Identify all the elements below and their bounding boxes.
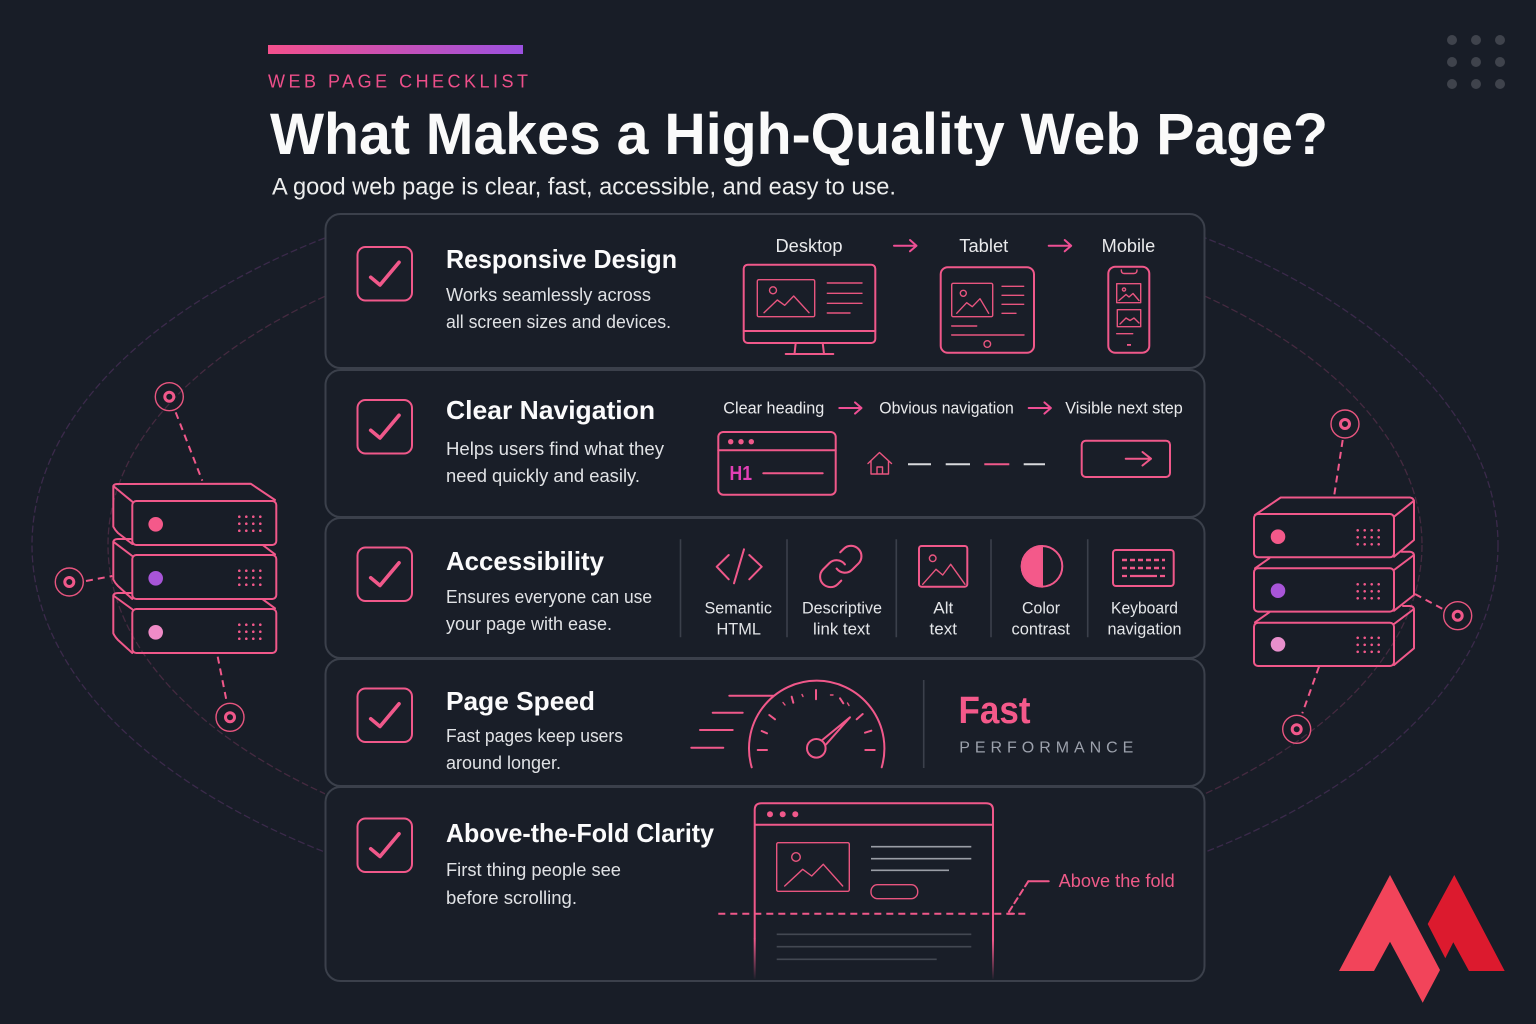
fold line (718, 913, 1027, 915)
right server illustration (1254, 410, 1472, 743)
column labels: navigation (1108, 620, 1182, 638)
server stack (1254, 498, 1414, 666)
nodes (55, 383, 244, 731)
description (446, 725, 623, 773)
panel: responsive design (326, 214, 1204, 368)
heading: Page Speed (446, 686, 595, 716)
panel: above-the-fold clarity (326, 787, 1204, 981)
column labels: HTML (716, 620, 761, 638)
icon: home (868, 452, 892, 474)
icon: checkbox (358, 688, 412, 742)
column labels: Color (1022, 600, 1060, 618)
next step button (1082, 441, 1170, 477)
panel: accessibility (326, 518, 1204, 658)
icon: contrast (1022, 546, 1062, 587)
description (446, 586, 652, 634)
icon: checkbox (358, 400, 412, 454)
step labels: Visible next step (1065, 400, 1183, 418)
browser mockup (755, 803, 993, 979)
divider (923, 680, 925, 768)
device labels: Tablet (959, 236, 1008, 256)
device labels: Mobile (1102, 236, 1155, 256)
panel: page speed (326, 659, 1204, 786)
description (446, 438, 665, 486)
icon: tablet (941, 267, 1034, 353)
Fast label: Fast (958, 690, 1031, 732)
column labels: Keyboard (1111, 600, 1178, 618)
callout leader (1008, 881, 1049, 914)
description (446, 859, 621, 908)
dashed connectors (86, 412, 227, 702)
logo (1339, 875, 1505, 1003)
description: all screen sizes and devices. (446, 311, 671, 332)
description: Works seamlessly across (446, 284, 651, 305)
icon: code (717, 549, 762, 583)
icon: checkbox (358, 548, 412, 601)
description: need quickly and easily. (446, 465, 640, 486)
icon: checkbox (358, 247, 412, 300)
icon: speedometer (691, 681, 884, 767)
column labels: text (930, 620, 957, 638)
icon: checkbox (358, 818, 412, 872)
eyebrow: WEB PAGE CHECKLIST (268, 72, 528, 92)
description: before scrolling. (446, 887, 577, 908)
vent dots (1358, 530, 1380, 652)
step labels (723, 400, 1183, 418)
callout label: Above the fold (1059, 871, 1175, 891)
description: around longer. (446, 752, 561, 773)
performance label: PERFORMANCE (959, 740, 1133, 756)
description (446, 284, 671, 332)
icon: mobile (1108, 267, 1149, 353)
dashed connectors (1302, 440, 1443, 713)
subtitle: A good web page is clear, fast, accessible, and easy to use. (272, 174, 896, 200)
status lights (148, 517, 163, 640)
step labels: Obvious navigation (879, 400, 1014, 418)
icon: desktop (744, 265, 875, 354)
heading: Clear Navigation (446, 395, 655, 425)
device labels (776, 236, 1155, 256)
icon: link (820, 546, 861, 587)
description: Helps users find what they (446, 438, 665, 459)
nodes (1283, 410, 1472, 743)
description: Fast pages keep users (446, 725, 623, 746)
icon: image (919, 546, 967, 587)
background orbit rings (31, 238, 1499, 852)
panel: clear navigation (326, 370, 1204, 517)
navigation dashes (908, 463, 1045, 465)
device labels: Desktop (776, 236, 842, 256)
heading: Accessibility (446, 546, 605, 576)
description: your page with ease. (446, 613, 612, 634)
column labels: contrast (1012, 620, 1070, 638)
column labels: Semantic (704, 600, 772, 618)
heading: Above-the-Fold Clarity (446, 818, 715, 848)
title: What Makes a High-Quality Web Page? (270, 102, 1328, 167)
column labels: link text (813, 620, 870, 638)
vent dots (239, 517, 261, 639)
icon: keyboard (1113, 550, 1174, 586)
column labels: Alt (933, 600, 954, 618)
decorative dot grid, top right (1447, 35, 1505, 89)
column dividers (680, 539, 1088, 637)
arrows (839, 402, 1051, 414)
left server illustration (55, 383, 276, 731)
step labels: Clear heading (723, 400, 824, 418)
column labels: Descriptive (802, 600, 882, 618)
server stack (113, 484, 276, 653)
description: First thing people see (446, 859, 621, 880)
header accent bar (268, 45, 523, 54)
heading: Responsive Design (446, 244, 677, 274)
H1 label: H1 (730, 463, 752, 485)
icon: page with H1 (718, 432, 836, 495)
description: Ensures everyone can use (446, 586, 652, 607)
status lights (1271, 529, 1285, 652)
arrows (894, 240, 1071, 251)
column labels (704, 600, 1182, 638)
